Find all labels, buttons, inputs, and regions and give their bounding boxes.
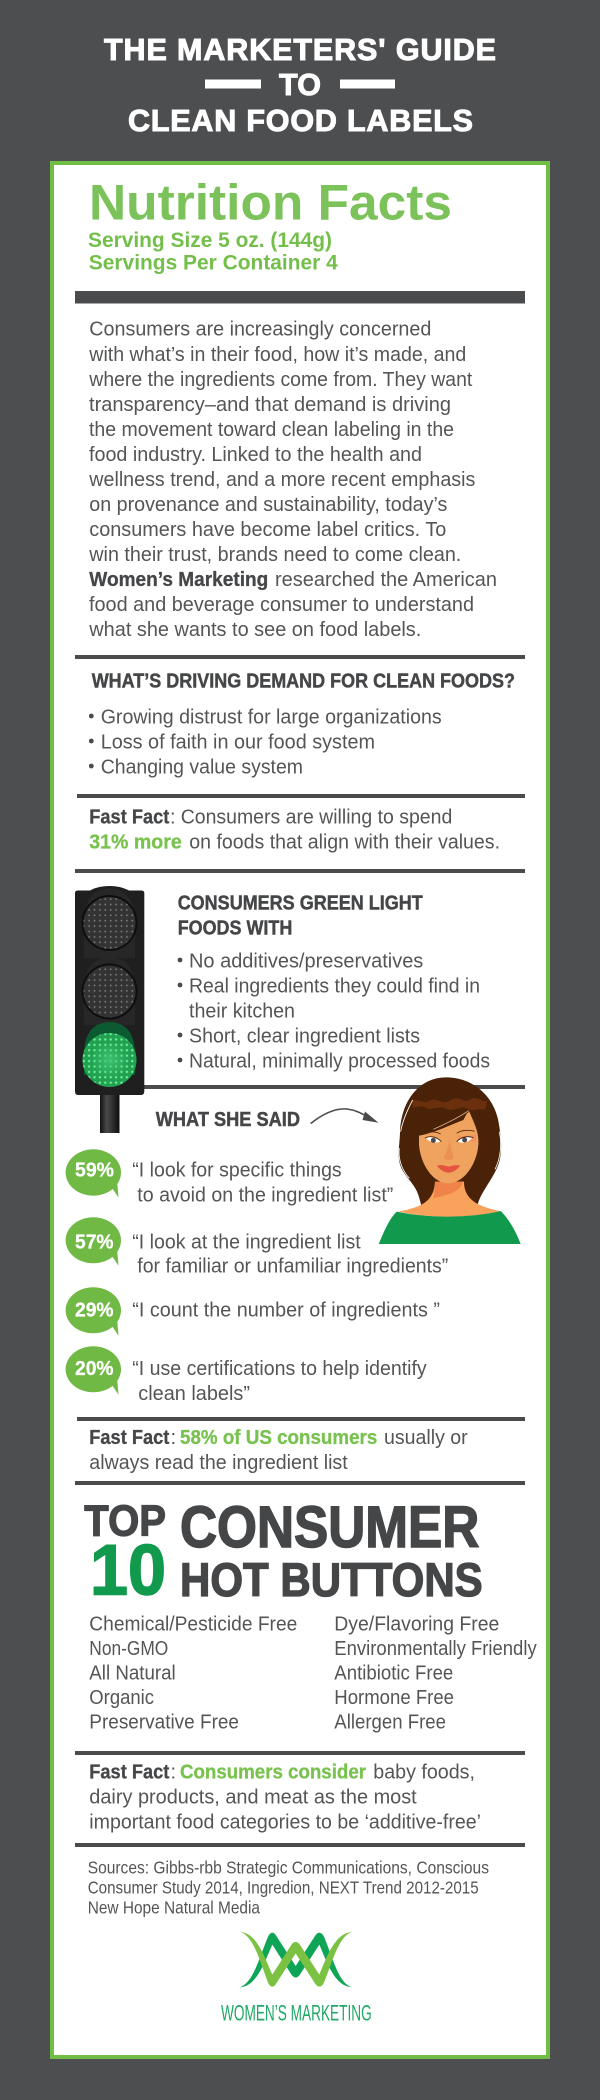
intro paragraph — [88, 319, 497, 641]
heading: green light foods: FOODS WITH — [178, 916, 292, 939]
fast fact: consumers consider: baby foods, — [373, 1761, 475, 1783]
bullet list: green light items: No additives/preservatives — [189, 950, 423, 972]
quote text: “I use certifications to help identify — [132, 1358, 427, 1380]
heading: green light foods: CONSUMERS GREEN LIGHT — [178, 891, 423, 914]
fast fact: 31% more — [89, 806, 500, 853]
list: hot buttons right column: Allergen Free — [334, 1711, 446, 1733]
list: hot buttons left column: Organic — [89, 1687, 154, 1709]
intro paragraph: consumers have become label critics. To — [89, 519, 446, 541]
fast fact: 58% of US consumers: : — [170, 1427, 176, 1449]
quote text: clean labels” — [138, 1383, 250, 1405]
fast fact: consumers consider: dairy products, and meat as the most — [89, 1786, 417, 1808]
bullet list: green light items: their kitchen — [189, 1000, 295, 1022]
speech bubble: 57% — [66, 1217, 121, 1266]
intro paragraph: food and beverage consumer to understand — [89, 594, 474, 616]
section: what's driving demand — [89, 670, 515, 778]
bullet list: green light items: Natural, minimally processed foods — [189, 1050, 490, 1072]
intro paragraph: with what’s in their food, how it’s made, and — [88, 344, 466, 366]
heading: nutrition facts: Servings Per Container 4 — [89, 250, 338, 274]
fast fact: 31% more: Consumers are willing to spend — [181, 806, 452, 828]
quote: 57% — [66, 1217, 448, 1278]
list: hot buttons left column: Chemical/Pesticide Free — [89, 1614, 297, 1636]
bullet list: demand drivers: Loss of faith in our food system — [101, 731, 375, 753]
fast fact: 31% more: Fast Fact — [89, 806, 170, 828]
list: hot buttons right column — [334, 1614, 537, 1733]
list: hot buttons right column: Dye/Flavoring Free — [334, 1614, 499, 1636]
bullet list: demand drivers: Growing distrust for large organizations — [101, 706, 442, 728]
speech bubble: 20%: 20% — [75, 1357, 114, 1380]
intro paragraph: researched the American — [275, 569, 497, 591]
quote text — [132, 1358, 427, 1405]
heading: nutrition facts — [88, 174, 452, 274]
sources: New Hope Natural Media — [88, 1897, 260, 1917]
fast fact: consumers consider: : — [170, 1761, 176, 1783]
fast fact: consumers consider: important food categories to be ‘additive-free’ — [89, 1811, 481, 1833]
title: TO — [279, 68, 321, 102]
quote text: “I count the number of ingredients ” — [132, 1300, 440, 1322]
list: hot buttons left column: Non-GMO — [89, 1638, 168, 1660]
heading: what she said: WHAT SHE SAID — [156, 1108, 300, 1131]
speech bubble: 59% — [66, 1149, 121, 1198]
intro paragraph: food industry. Linked to the health and — [89, 444, 422, 466]
fast fact: 31% more: : — [170, 806, 176, 828]
quote: 29% — [66, 1287, 440, 1336]
heading: top 10 consumer hot buttons — [84, 1495, 483, 1610]
heading: top 10 consumer hot buttons: HOT BUTTONS — [180, 1554, 483, 1607]
quote: 20% — [66, 1346, 427, 1405]
fast fact: consumers consider — [89, 1761, 481, 1833]
intro paragraph: on provenance and sustainability, today’s — [89, 494, 447, 516]
fast fact: 31% more: on foods that align with their values. — [189, 831, 500, 853]
intro paragraph: win their trust, brands need to come clean. — [88, 544, 461, 566]
bullet list: green light items: Real ingredients they could find in — [189, 975, 480, 997]
fast fact: consumers consider: Fast Fact — [89, 1761, 170, 1783]
quote text — [132, 1160, 393, 1207]
panel: nutrition label — [52, 163, 548, 2057]
illustration: woman — [379, 1077, 521, 1244]
quote text: “I look for specific things — [132, 1160, 342, 1182]
speech bubble: 57%: 57% — [75, 1230, 114, 1253]
intro paragraph: transparency–and that demand is driving — [89, 394, 451, 416]
bullet list: green light items: Short, clear ingredient lists — [189, 1025, 420, 1047]
sources — [88, 1857, 489, 1917]
speech bubble: 29%: 29% — [75, 1299, 114, 1322]
intro paragraph: the movement toward clean labeling in the — [89, 419, 454, 441]
bullet list: green light items — [178, 950, 490, 1072]
fast fact: 31% more: 31% more — [89, 831, 182, 853]
bullet list: demand drivers: Changing value system — [101, 756, 303, 778]
heading: top 10 consumer hot buttons: 10 — [90, 1531, 166, 1610]
fast fact: 58% of US consumers: always read the ingredient list — [89, 1452, 348, 1474]
title: THE MARKETERS' GUIDE — [104, 33, 496, 67]
list: hot buttons left column: All Natural — [89, 1662, 176, 1684]
list: hot buttons right column: Environmentally Friendly — [334, 1638, 537, 1660]
quote text: for familiar or unfamiliar ingredients” — [137, 1256, 448, 1278]
list: hot buttons left column: Preservative Free — [89, 1711, 239, 1733]
speech bubble: 59%: 59% — [75, 1159, 114, 1182]
fast fact: 58% of US consumers: usually or — [384, 1427, 468, 1449]
icon: woven logo mark — [239, 1932, 352, 1987]
heading: top 10 consumer hot buttons: TOP — [84, 1497, 166, 1546]
quote text: “I look at the ingredient list — [132, 1231, 361, 1253]
title: CLEAN FOOD LABELS — [128, 104, 473, 138]
heading: green light foods — [178, 891, 423, 939]
section: consumers green light — [178, 891, 490, 1072]
intro paragraph: wellness trend, and a more recent emphasis — [88, 469, 475, 491]
heading: nutrition facts: Nutrition Facts — [89, 174, 452, 230]
intro paragraph: Consumers are increasingly concerned — [89, 319, 431, 341]
intro paragraph: where the ingredients come from. They want — [88, 369, 473, 391]
sources: Consumer Study 2014, Ingredion, NEXT Trend 2012-2015 — [88, 1877, 479, 1897]
wordmark: WOMEN’S MARKETING — [221, 2000, 372, 2025]
heading: top 10 consumer hot buttons: CONSUMER — [180, 1495, 479, 1560]
logo: women's marketing — [221, 1932, 372, 2025]
sources: Sources: Gibbs-rbb Strategic Communications, Conscious — [88, 1857, 489, 1877]
title — [104, 33, 496, 138]
fast fact: consumers consider: Consumers consider — [180, 1761, 366, 1783]
icon: traffic light — [75, 886, 144, 1133]
bullet list: demand drivers — [89, 706, 442, 778]
list: hot buttons right column: Hormone Free — [334, 1687, 454, 1709]
list: hot buttons right column: Antibiotic Free — [334, 1662, 453, 1684]
arrow: to woman — [311, 1109, 378, 1124]
speech bubble: 29% — [66, 1287, 121, 1336]
list: hot buttons left column — [89, 1614, 297, 1733]
quote: 59% — [66, 1149, 393, 1207]
fast fact: 58% of US consumers — [89, 1427, 468, 1474]
quote text: to avoid on the ingredient list” — [137, 1185, 393, 1207]
heading: demand: WHAT’S DRIVING DEMAND FOR CLEAN FOODS? — [92, 670, 515, 693]
fast fact: 58% of US consumers: 58% of US consumers — [180, 1427, 377, 1449]
intro paragraph: Women’s Marketing — [89, 569, 268, 591]
quote text — [132, 1231, 448, 1278]
heading: nutrition facts: Serving Size 5 oz. (144g) — [88, 228, 332, 252]
fast fact: 58% of US consumers: Fast Fact — [89, 1427, 170, 1449]
intro paragraph: what she wants to see on food labels. — [88, 619, 421, 641]
speech bubble: 20% — [66, 1346, 121, 1395]
thick divider bar — [75, 291, 525, 304]
